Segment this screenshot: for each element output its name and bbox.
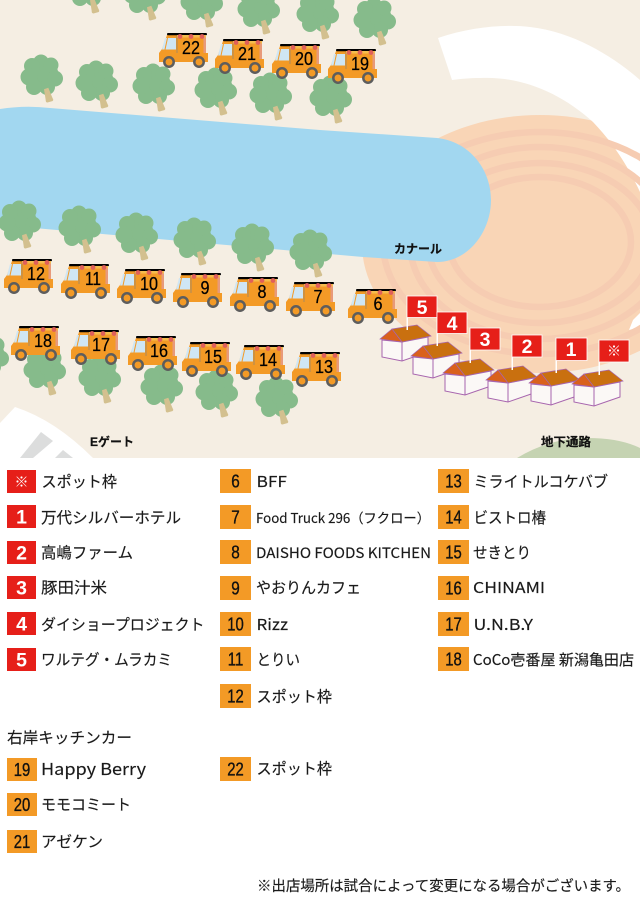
truck 18 [11,326,60,360]
legend: 4: 4 [16,614,27,636]
truck 17 [71,330,120,364]
legend: 18: 18 [445,650,462,670]
legend: 15: せきとり [473,541,531,563]
legend: 8: DAISHO FOODS KITCHEN [256,542,431,563]
truck 20: 20 [295,49,313,69]
legend: 20 [7,793,131,816]
trees [0,0,396,424]
legend: 17: 17 [445,614,462,634]
truck 15: 15 [204,347,222,367]
truck 9: 9 [200,278,210,298]
truck 13: 13 [315,357,333,377]
legend: 1: 万代シルバーホテル [41,506,181,528]
legend: 7 [220,505,430,529]
house with flag 4 [411,312,467,378]
truck 14: 14 [259,350,277,370]
truck 16 [128,336,177,370]
legend: 10: Rizz [256,613,288,635]
white gate area [0,407,93,458]
legend: 7: 7 [231,508,240,528]
truck 6 [348,289,397,323]
footnote: ※出店場所は試合によって変更になる場合がございます。 [257,875,630,896]
label: underground passage: 地下通路 [541,434,591,449]
legend: 20: 20 [14,795,30,815]
legend: 13: 13 [445,472,462,492]
house with flag 3 [443,328,500,395]
legend: 9: やおりんカフェ [256,576,361,598]
truck 21: 21 [238,44,256,64]
legend: 6: BFF [256,470,287,492]
legend: 10: 10 [227,614,244,634]
legend: 9: 9 [231,578,240,598]
legend: 11: 11 [228,650,243,670]
house with spot flag [572,340,629,406]
legend: spot: スポット枠 [42,470,117,492]
truck 22 [159,33,208,67]
legend: 21 [7,830,103,853]
truck 10 [117,269,166,303]
house with flag 2 [486,335,542,402]
legend: 17: U.N.B.Y [474,613,534,635]
truck 19 [328,49,377,83]
legend: 19 [7,756,146,781]
legend: 21: 21 [14,832,30,852]
legend: 3: 3 [16,578,27,600]
legend: 17 [438,612,534,636]
legend: 14: ビストロ椿 [474,506,546,528]
truck 7 [286,282,335,316]
legend: 14 [438,505,546,529]
label: canal: カナール [394,242,442,256]
truck 14 [236,345,285,379]
legend: 10 [220,612,288,636]
legend: 19: 19 [14,760,30,780]
legend: 4: ダイショープロジェクト [41,613,204,635]
legend: 6: 6 [231,472,240,492]
truck 20 [272,44,321,78]
legend: 11: とりい [256,648,300,670]
legend: 1: 1 [16,506,27,528]
legend: 16: CHINAMI [473,576,545,598]
heading: right bank kitchen cars: 右岸キッチンカー [7,726,132,748]
house with flag 2: 2 [522,336,533,358]
truck 11: 11 [85,269,101,289]
legend: 12 [220,684,332,708]
truck 12 [4,259,53,293]
house with flag 5 [380,296,437,361]
legend: 16 [438,576,545,600]
house with flag 1 [529,338,587,405]
truck 21 [215,39,264,73]
legend: 15: 15 [445,542,462,562]
legend: 5: 5 [16,650,27,672]
legend: 19: Happy Berry [41,756,146,780]
green area [517,438,640,458]
legend: 9 [220,576,361,600]
legend: spot [7,470,117,493]
legend: 11 [220,647,300,671]
legend: 8: 8 [231,542,240,562]
truck 19: 19 [351,54,369,74]
house with flag 4: 4 [447,313,458,335]
truck 17: 17 [92,335,110,355]
legend: 2: 2 [16,542,27,564]
legend: 7: Food Truck 296（フクロー） [256,507,430,527]
truck 8: 8 [258,282,266,302]
legend: 3: 豚田汁米 [41,576,107,598]
legend: 15 [438,540,531,564]
legend: 13: ミライトルコケバブ [474,470,608,492]
legend: 21: アゼケン [41,830,103,852]
truck 7: 7 [314,287,322,307]
truck 12: 12 [27,264,45,284]
label: E gate: Eゲート [90,434,134,449]
legend: 12: 12 [227,686,244,706]
legend: 18: CoCo壱番屋 新潟亀田店 [473,649,634,670]
truck 13 [292,352,341,386]
truck 6: 6 [374,294,382,314]
legend: 5: ワルテグ・ムラカミ [41,648,172,670]
truck 15 [182,342,231,376]
legend: 14: 14 [445,508,462,528]
truck 10: 10 [140,274,158,294]
legend: spot: ※ [14,472,28,492]
legend: 22: スポット枠 [256,757,332,779]
map background [0,0,640,458]
house with spot flag: ※ [607,341,621,361]
legend: 2: 高嶋ファーム [41,541,133,563]
legend: 3 [7,576,107,600]
truck 11 [61,264,110,298]
legend: 6 [220,469,287,493]
truck 9 [173,273,222,307]
legend: 12: スポット枠 [256,685,332,707]
truck 18: 18 [34,331,52,351]
truck 8 [230,277,279,311]
legend: 20: モモコミート [41,793,131,815]
stadium [362,26,640,373]
legend: 16: 16 [445,578,462,598]
truck 16: 16 [150,341,168,361]
legend: 8 [220,540,431,564]
legend: 22 [220,757,332,781]
canal water [0,107,491,262]
legend: 22: 22 [227,760,244,780]
house with flag 5: 5 [417,297,428,319]
house with flag 3: 3 [480,329,491,351]
house with flag 1: 1 [566,339,577,361]
truck 22: 22 [182,38,200,58]
legend: 2 [7,541,133,564]
